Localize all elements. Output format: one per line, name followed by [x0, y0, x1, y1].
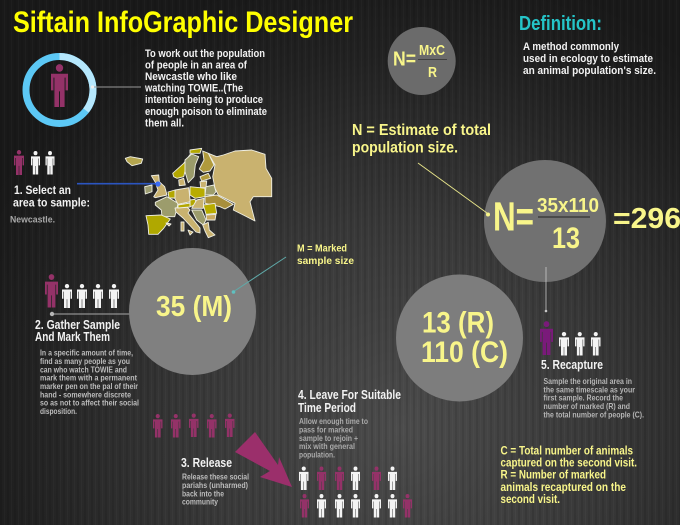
step 2 text: hand - somewhere discrete: [40, 389, 131, 399]
step 4 text: population.: [299, 450, 335, 460]
connector line: [50, 312, 130, 316]
people row: [153, 414, 234, 438]
icon: ring with person: [26, 56, 93, 124]
M label: sample size: [297, 255, 354, 267]
M pointer line: [232, 257, 286, 294]
panel: definition: [519, 13, 656, 77]
step 2 text: can who watch TOWIE and: [40, 364, 127, 374]
N label: N = Estimate of total: [352, 122, 491, 139]
marked sample circle: [129, 248, 256, 375]
intro text: [144, 48, 267, 130]
N label: population size.: [352, 140, 458, 157]
intro text: enough poison to eliminate: [145, 106, 267, 118]
calculation: =296: [613, 203, 680, 235]
title: Siftain InfoGraphic Designer: [13, 6, 353, 39]
step 2 heading: 2. Gather Sample: [35, 317, 120, 332]
blue pointer to Newcastle: [77, 181, 161, 187]
formula text: MxC: [419, 43, 445, 59]
recapture circle: [396, 274, 523, 402]
step 2 text: In a specific amount of time,: [40, 348, 133, 358]
panel: step 4: [298, 388, 412, 518]
C and R definitions: animals recaptured on the: [500, 480, 626, 494]
formula text: [393, 43, 447, 81]
panel: intro: [26, 48, 267, 130]
step 1 text: Newcastle.: [10, 214, 55, 226]
intro text: intention being to produce: [145, 94, 263, 106]
C and R definitions: C = Total number of animals: [500, 444, 633, 458]
step 3 text: community: [182, 497, 218, 507]
step 2 text: marker pen on the pal of their: [40, 381, 139, 391]
step 5 text: first sample. Record the: [544, 393, 623, 403]
definition text: A method commonly: [523, 41, 620, 53]
N pointer line: [418, 163, 490, 216]
connector line: [91, 85, 141, 89]
step 2 heading: [35, 317, 120, 344]
mixed people: [299, 467, 412, 518]
definition text: [523, 41, 656, 77]
panel: estimate: [352, 122, 680, 312]
connector line: [545, 267, 547, 312]
step 4 text: Allow enough time to: [299, 416, 368, 426]
C and R definitions: captured on the second visit.: [500, 456, 637, 470]
C and R definitions: second visit.: [500, 492, 560, 506]
M label: M = Marked: [297, 242, 347, 254]
step 5 text: [544, 376, 644, 419]
C and R definitions: [500, 444, 637, 506]
step 2 text: find as many people as you: [40, 356, 130, 366]
definition text: an animal population's size.: [523, 65, 656, 77]
step 4 heading: Time Period: [298, 401, 356, 415]
intro text: To work out the population: [145, 48, 265, 60]
step 3 heading: 3. Release: [181, 456, 232, 470]
step 5 text: Sample the original area in: [544, 376, 632, 386]
calculation: 35x110: [537, 194, 599, 217]
panel: step 1: [10, 148, 272, 238]
people row: [540, 321, 600, 356]
people row: [14, 150, 54, 175]
calculation: 13: [552, 222, 580, 255]
intro text: watching TOWIE..(The: [144, 82, 243, 94]
step 2 text: so as not to affect their social: [40, 398, 139, 408]
calculation: [493, 194, 680, 255]
C and R definitions: R = Number of marked: [500, 468, 606, 482]
formula text: N=: [393, 48, 416, 70]
step 3 text: pariahs (unharmed): [182, 480, 248, 490]
N label: [352, 122, 491, 157]
marked sample circle: 35 (M): [156, 291, 232, 323]
step 4 heading: 4. Leave For Suitable: [298, 388, 401, 402]
map of Europe: [125, 148, 272, 238]
panel: step 3: [153, 414, 292, 507]
definition text: used in ecology to estimate: [523, 53, 653, 65]
step 4 text: pass for marked: [299, 424, 353, 434]
step 5 text: the total number of people (C).: [544, 409, 644, 419]
step 5 heading: 5. Recapture: [541, 357, 603, 372]
intro text: Newcastle who like: [145, 71, 237, 83]
recapture circle: 13 (R): [422, 307, 494, 340]
formula text: R: [428, 65, 437, 81]
step 2 heading: And Mark Them: [35, 329, 110, 344]
intro text: of people in an area of: [145, 60, 247, 72]
step 4 text: mix with general: [299, 441, 355, 451]
panel: step 5: [396, 274, 644, 506]
step 1 heading: area to sample:: [13, 196, 90, 210]
step 3 text: [182, 472, 249, 507]
step 3 text: Release these social: [182, 472, 249, 482]
step 5 text: the same timescale as your: [544, 384, 636, 394]
panel: step 2: [35, 242, 354, 416]
step 1 heading: [13, 183, 90, 210]
step 3 text: back into the: [182, 488, 224, 498]
definition heading: Definition:: [519, 13, 602, 35]
step 2 text: disposition.: [40, 406, 77, 416]
arrow: [235, 432, 292, 487]
step 4 text: [299, 416, 368, 460]
step 4 heading: [298, 388, 401, 415]
step 1 heading: 1. Select an: [14, 183, 71, 197]
people row: [45, 274, 119, 308]
step 5 text: number of marked (R) and: [544, 401, 630, 411]
step 2 text: mark them with a permanent: [40, 373, 137, 383]
step 4 text: sample to rejoin +: [299, 433, 358, 443]
panel: formula: [388, 27, 456, 95]
intro text: them all.: [145, 118, 184, 130]
recapture circle: 110 (C): [421, 336, 508, 369]
calculation circle: [484, 160, 606, 282]
calculation: N=: [493, 194, 534, 240]
M label: [297, 242, 354, 267]
formula circle: [388, 27, 456, 95]
step 2 text: [40, 348, 139, 416]
